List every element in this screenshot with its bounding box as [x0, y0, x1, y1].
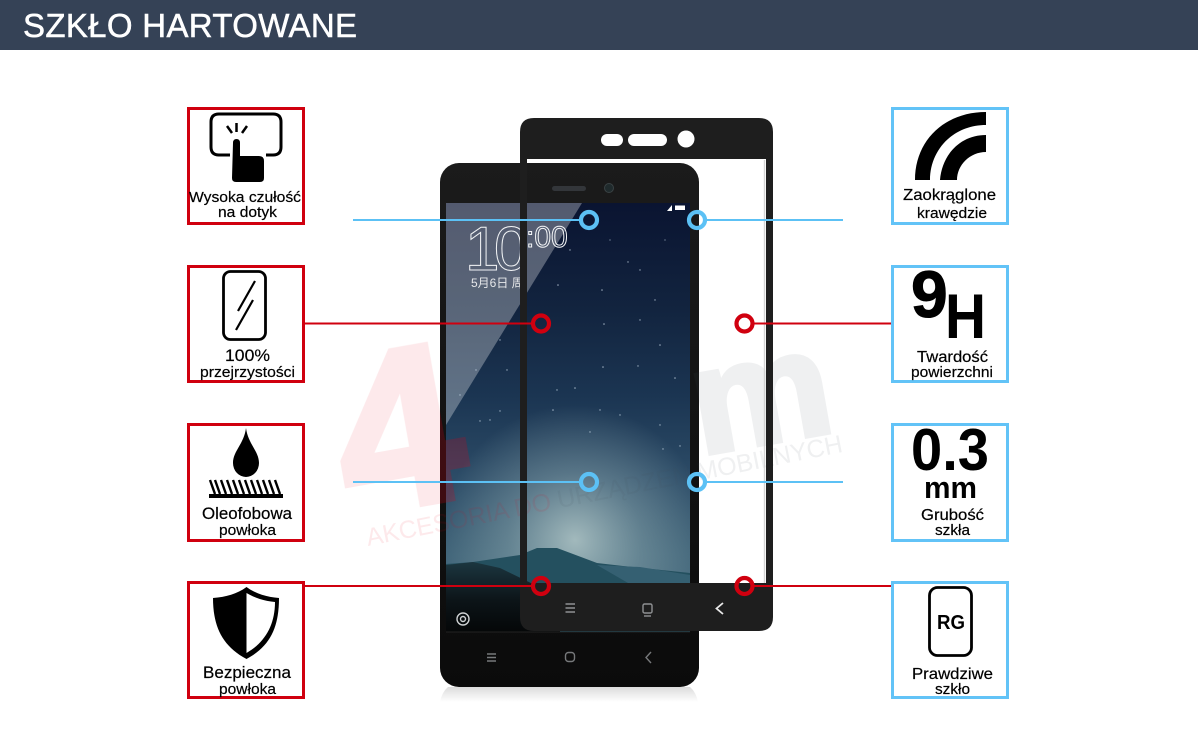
app icon — [457, 613, 469, 625]
header bar — [0, 0, 1198, 50]
phone speaker — [552, 186, 586, 191]
panel: 0.3 mm thickness — [892, 417, 1008, 540]
watermark: 4 — [315, 293, 482, 563]
clock minutes: :00 — [526, 221, 568, 254]
clock hours: 0 — [494, 215, 528, 284]
connector lines — [304, 220, 892, 586]
icon: RG glass: RG — [937, 612, 965, 634]
label: powłoka — [219, 522, 277, 539]
far hills — [446, 548, 690, 640]
icon: 0.3 mm: mm — [924, 470, 977, 505]
marker points — [533, 212, 752, 594]
icon: droplet on surface — [209, 428, 283, 498]
label: Twardość — [917, 349, 988, 366]
panel: safe coating — [188, 582, 304, 698]
label: szkło — [935, 682, 970, 698]
label: Bezpieczna — [203, 664, 292, 682]
label — [911, 349, 993, 381]
label — [200, 346, 295, 381]
watermark: m — [676, 297, 844, 487]
panel: 9H hardness — [892, 257, 1008, 382]
glass inner edge — [764, 160, 766, 583]
label: Zaokrąglone — [903, 187, 996, 204]
tempered glass panel — [520, 118, 773, 631]
phone navigation keys — [487, 652, 651, 663]
label: przejrzystości — [200, 364, 295, 381]
label: Grubość — [921, 507, 984, 524]
phone screen — [446, 203, 690, 640]
icon: 9H: 9 — [911, 257, 948, 331]
watermark: AKCESORIA DO URZĄDZEŃ MOBILNYCH — [364, 429, 845, 552]
label — [189, 189, 302, 221]
label: powłoka — [219, 681, 277, 698]
status icons — [667, 205, 685, 211]
icon: shield — [213, 587, 279, 659]
icon: touch — [211, 114, 281, 182]
label: powierzchni — [911, 364, 993, 381]
phone camera — [604, 184, 614, 192]
glass earpiece cutouts — [601, 130, 694, 148]
phone body — [440, 163, 699, 687]
label — [921, 507, 984, 539]
label: 100% — [225, 346, 270, 365]
panel: transparency — [188, 266, 304, 382]
label: szkła — [935, 523, 971, 539]
label — [203, 664, 292, 698]
label: Oleofobowa — [202, 505, 293, 523]
phone photo — [440, 163, 699, 687]
icon: glass sheet — [224, 272, 266, 340]
watermark — [340, 342, 842, 546]
watermark: 4 — [315, 293, 482, 563]
icon: 9H — [911, 257, 986, 352]
label — [912, 666, 993, 698]
clock hours: 1 — [465, 215, 499, 284]
label — [202, 505, 293, 539]
icon: 0.3 mm: 0.3 — [911, 417, 989, 483]
panel: touch sensitivity — [188, 108, 304, 224]
clock hours — [469, 226, 520, 271]
icon: 9H: H — [945, 282, 986, 352]
icon: curved edges — [915, 112, 986, 180]
label: krawędzie — [917, 206, 987, 222]
label — [903, 187, 996, 222]
near hills — [446, 562, 560, 632]
title: SZKŁO HARTOWANE — [23, 7, 357, 44]
label: Wysoka czułość — [189, 189, 302, 206]
date: 5月6日 周三 — [471, 276, 536, 290]
glass navigation keys — [566, 603, 723, 616]
label: Prawdziwe — [912, 666, 993, 683]
phone reflection — [440, 687, 698, 702]
panel: rounded edges — [892, 108, 1008, 224]
panel: real glass — [892, 582, 1008, 698]
label: na dotyk — [218, 205, 278, 221]
panel: oleophobic coating — [188, 424, 304, 540]
